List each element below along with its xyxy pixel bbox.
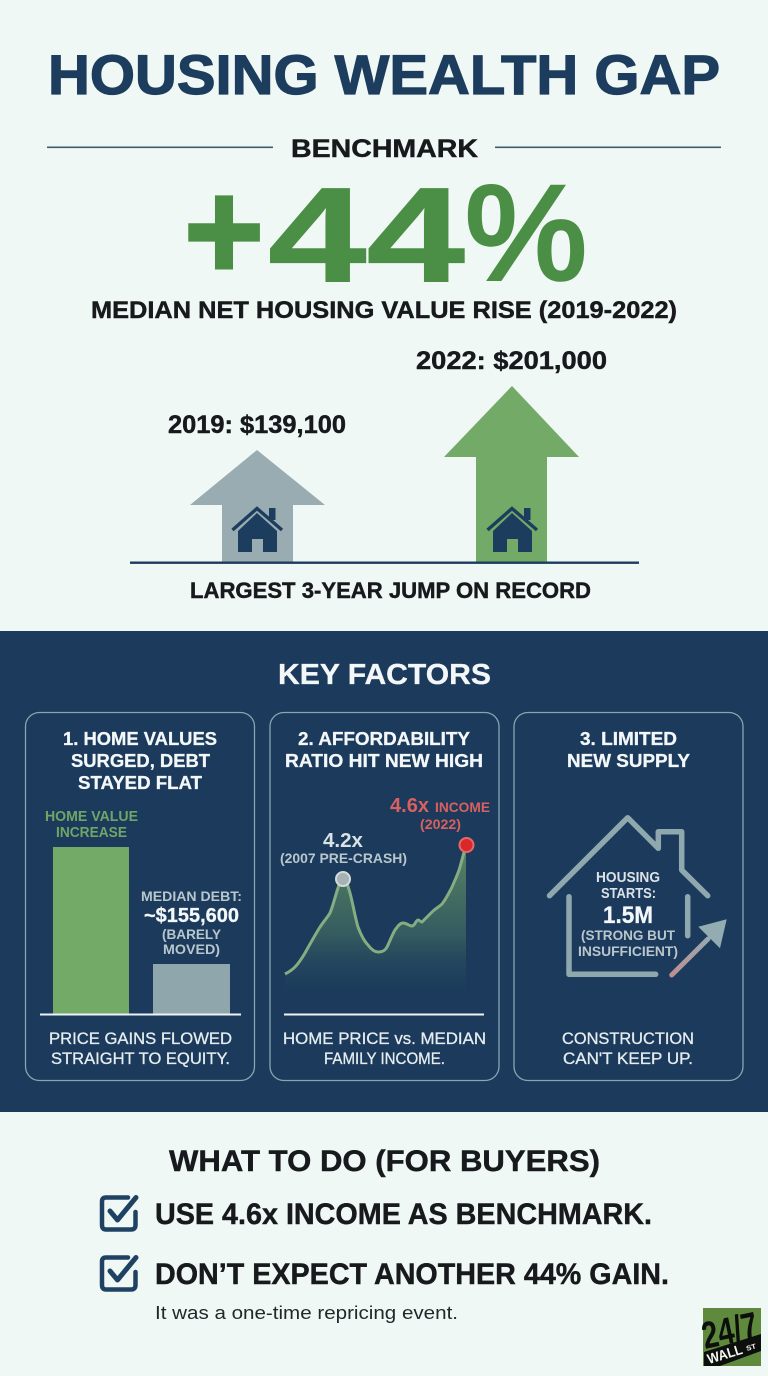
bar label: median debt: MEDIAN DEBT: (141, 888, 242, 904)
card 1 heading: SURGED, DEBT (71, 750, 211, 771)
icon: house outline (550, 818, 708, 974)
bar label: median debt: ~$155,600 (144, 905, 239, 927)
card 3 heading: 3. LIMITED (580, 728, 677, 749)
card 2 footer (283, 1029, 486, 1068)
title: HOUSING WEALTH GAP (48, 43, 720, 106)
card 3 heading (567, 728, 691, 771)
card 1 footer: PRICE GAINS FLOWED (49, 1029, 232, 1048)
card 2 heading: 2. AFFORDABILITY (298, 728, 471, 749)
bar label: home value increase: HOME VALUE (45, 809, 138, 825)
bar label: median debt: MOVED) (163, 941, 220, 957)
bar label: median debt (141, 888, 242, 957)
label: 2019 value: 2019: $139,100 (168, 411, 346, 439)
card 2: affordability (270, 712, 499, 1080)
card 2 heading: RATIO HIT NEW HIGH (285, 750, 483, 771)
arrow: 2019 grey (190, 450, 325, 562)
value comparison arrows (130, 347, 639, 564)
card 1 heading: STAYED FLAT (78, 772, 203, 793)
bar: median debt (153, 964, 230, 1014)
text: action 2: DON’T EXPECT ANOTHER 44% GAIN. (155, 1258, 669, 1291)
housing starts text: HOUSING (596, 870, 660, 886)
note: one-time event: It was a one-time repricing event. (155, 1303, 458, 1323)
card 3 heading: NEW SUPPLY (567, 750, 691, 771)
card 2 heading (285, 728, 483, 771)
housing starts text: 1.5M (603, 902, 653, 929)
icon: checkbox 1 (102, 1198, 136, 1230)
card 1 footer (49, 1029, 232, 1068)
icon: rising arrow (672, 919, 727, 975)
point: 2007 peak (336, 872, 350, 886)
annotation: 4.2x: 4.2x (323, 830, 363, 852)
card 1 heading: 1. HOME VALUES (63, 728, 217, 749)
bar label: home value increase (45, 809, 138, 841)
big stat: +44%: % (465, 159, 587, 308)
card 1 heading (63, 728, 217, 793)
bar label: median debt: (BARELY (162, 926, 222, 942)
panel: key factors (0, 631, 768, 1112)
card 2 footer: HOME PRICE vs. MEDIAN (283, 1029, 486, 1048)
stat caption: MEDIAN NET HOUSING VALUE RISE (2019-2022) (91, 297, 677, 324)
annotation: 4.6x income (390, 795, 490, 832)
chart axis (284, 1014, 484, 1016)
card 1: home values (26, 712, 254, 1080)
card 3 footer: CONSTRUCTION (562, 1029, 694, 1048)
logo: 24/7 Wall St: ST (746, 1343, 758, 1353)
point: 2022 peak (460, 838, 474, 852)
annotation: 4.2x (280, 830, 407, 866)
icon: house 2019 (232, 508, 282, 552)
housing starts text: INSUFFICIENT) (578, 943, 678, 959)
annotation: 4.2x: (2007 PRE-CRASH) (280, 850, 407, 866)
arrow: 2022 green (444, 386, 579, 562)
action item 1 (102, 1198, 652, 1231)
annotation: 4.6x income: INCOME (435, 799, 490, 815)
card 3 footer (562, 1029, 694, 1068)
annotation: 4.6x income: 4.6x (390, 795, 429, 817)
annotation: 4.6x income: (2022) (420, 816, 461, 832)
housing starts text: (STRONG BUT (581, 927, 675, 943)
icon: checkbox 2 (102, 1258, 136, 1290)
line chart: price to income ratio (284, 838, 484, 1016)
card 3: limited supply (514, 712, 743, 1080)
bar axis (40, 1014, 241, 1016)
action item 2 (102, 1258, 669, 1291)
icon: house 2022 (488, 508, 537, 552)
bar: home value (53, 847, 129, 1014)
big stat: +44% (184, 152, 587, 310)
heading: key factors: KEY FACTORS (278, 659, 491, 691)
housing starts text (578, 870, 678, 959)
section label: benchmark with rules: BENCHMARK (291, 135, 478, 163)
big stat: +44%: + (184, 152, 264, 309)
housing starts text: STARTS: (601, 886, 656, 902)
ground line (130, 562, 639, 564)
label: 2022 value: 2022: $201,000 (416, 347, 607, 375)
text: action 1: USE 4.6x INCOME AS BENCHMARK. (155, 1198, 652, 1231)
card 1 footer: STRAIGHT TO EQUITY. (51, 1049, 230, 1068)
logo: 24/7 Wall St: WALL (705, 1341, 745, 1367)
caption: largest jump: LARGEST 3-YEAR JUMP ON RECORD (190, 578, 591, 603)
heading: what to do: WHAT TO DO (FOR BUYERS) (169, 1145, 600, 1178)
card 3 footer: CAN'T KEEP UP. (563, 1049, 693, 1068)
bar label: home value increase: INCREASE (56, 825, 127, 841)
big stat: +44%: 44 (268, 160, 465, 310)
card 2 footer: FAMILY INCOME. (324, 1049, 445, 1068)
